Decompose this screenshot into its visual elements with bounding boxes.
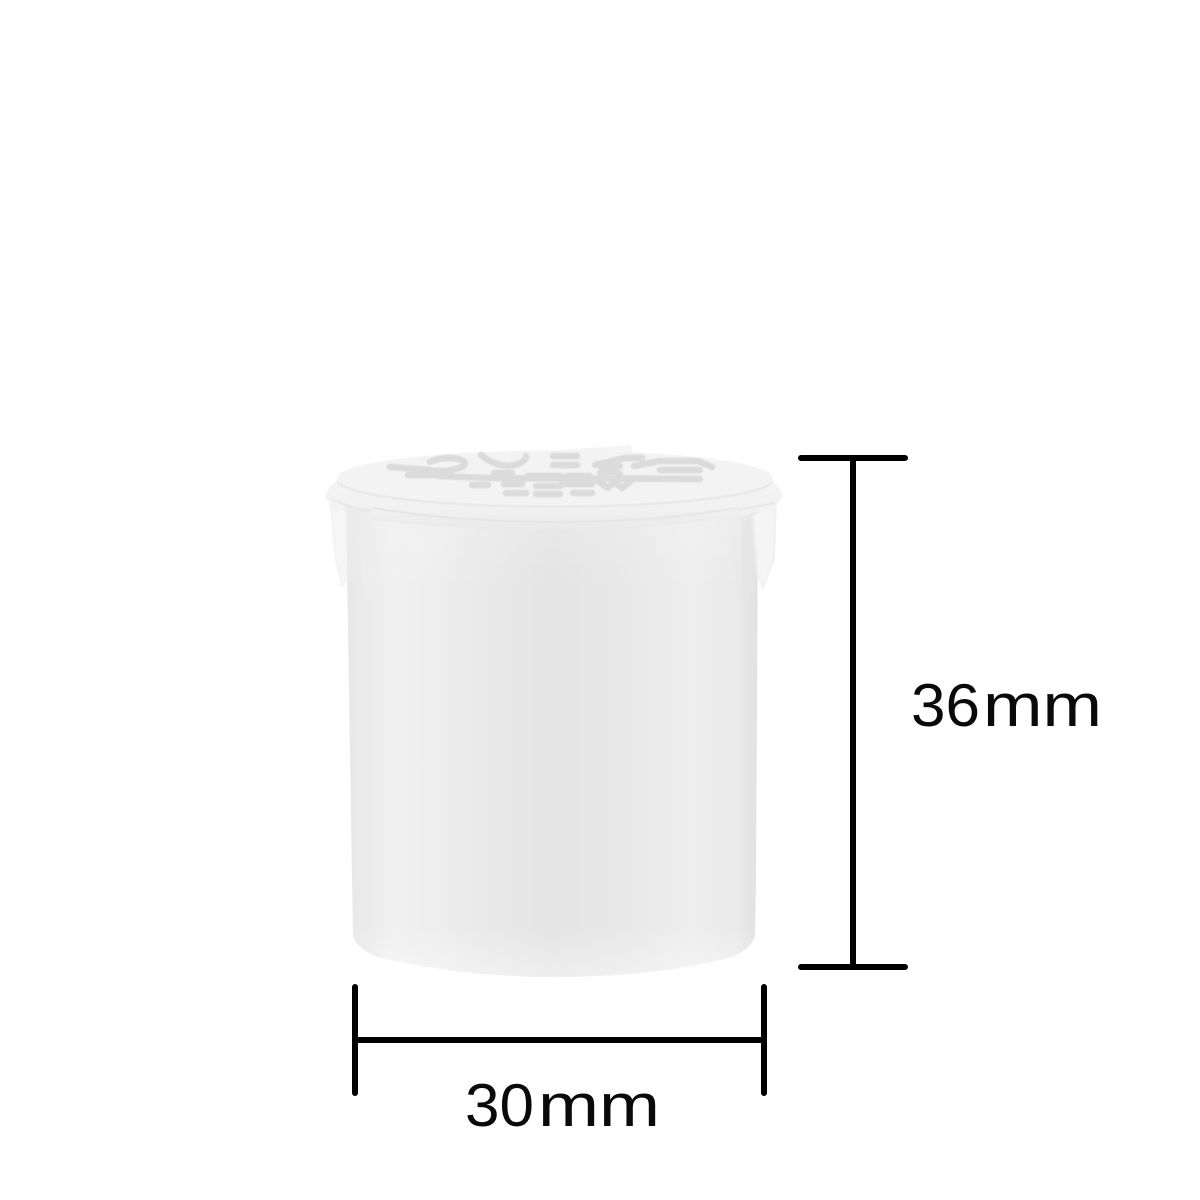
lid embossed mark bbox=[390, 455, 712, 494]
width dimension: 30mm bbox=[355, 987, 764, 1139]
width bracket bbox=[355, 987, 764, 1093]
body shading bbox=[346, 505, 758, 977]
container rim bbox=[325, 479, 782, 530]
container left tab bbox=[329, 500, 362, 589]
container right tab bbox=[735, 500, 777, 590]
height bracket bbox=[801, 458, 905, 967]
width label: mm bbox=[538, 1072, 660, 1139]
container body bbox=[346, 505, 758, 977]
height dimension: 36mm bbox=[801, 458, 1102, 967]
rim edge lines bbox=[334, 500, 775, 522]
lid bbox=[337, 450, 773, 506]
width label: 30 bbox=[465, 1072, 534, 1139]
lid flap bbox=[470, 445, 634, 462]
product: pop-top container bbox=[325, 445, 782, 977]
tab shading bbox=[332, 508, 773, 600]
lid underside bbox=[337, 454, 773, 508]
height label: mm bbox=[983, 672, 1102, 739]
height label: 36 bbox=[911, 672, 980, 739]
